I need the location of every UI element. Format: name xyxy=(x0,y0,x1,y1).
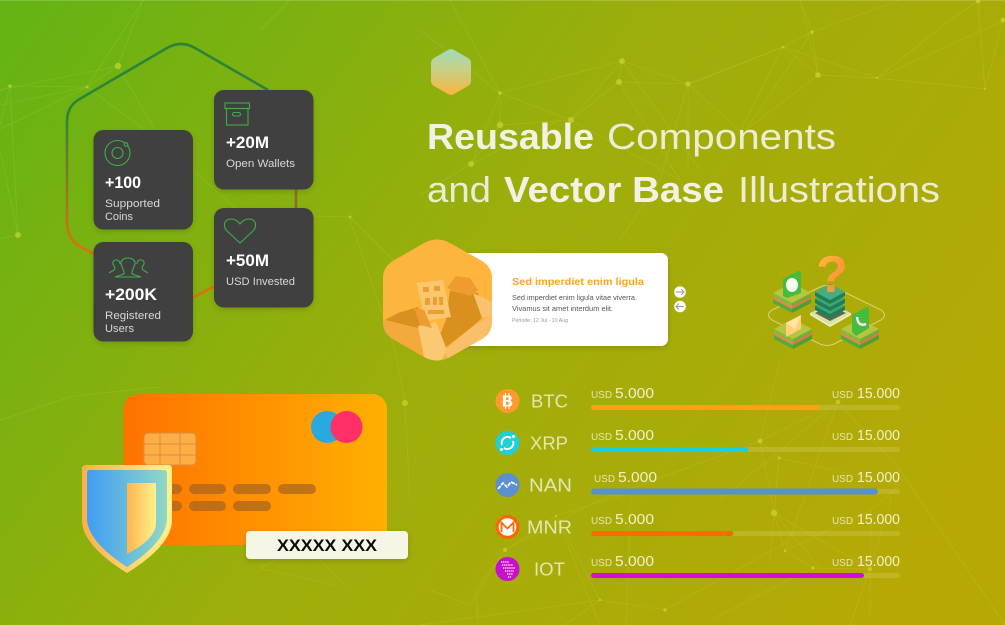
card logo circles xyxy=(311,411,362,443)
title: Illustrations xyxy=(738,169,940,210)
title xyxy=(427,116,940,210)
coin row: NAN: NAN xyxy=(529,474,572,496)
stat card: supported coins: Supported xyxy=(105,198,160,210)
promo card: Sed imperdiet enim ligula vitae viverra. xyxy=(512,293,637,302)
stat card: supported coins: Coins xyxy=(105,211,133,223)
coin row: BTC: BTC xyxy=(531,390,568,412)
stat card: open wallets: +20M xyxy=(226,133,269,152)
coin row: BTC: USD xyxy=(591,389,612,401)
coin row: XRP: USD xyxy=(591,431,612,443)
promo card: Periode: 12 Jul - 10 Aug xyxy=(512,318,568,324)
stat card: registered users xyxy=(94,242,193,342)
coin row: MNR: USD xyxy=(832,515,853,527)
coin row: XRP: XRP xyxy=(530,432,568,454)
icon: archive box xyxy=(225,103,250,125)
coin row: XRP: 15.000 xyxy=(857,428,900,444)
promo card: Sed imperdiet enim ligula xyxy=(512,276,644,288)
card chip xyxy=(144,433,196,465)
coin row: IOT: 5.000 xyxy=(615,554,654,570)
coin row: IOT xyxy=(496,554,900,581)
icon: bitcoin xyxy=(496,389,520,413)
hexagon photo xyxy=(383,240,492,360)
coin row: IOT: USD xyxy=(591,557,612,569)
icon: bitcoin: B xyxy=(502,394,513,410)
name label xyxy=(246,531,408,559)
coin row: IOT: 15.000 xyxy=(857,554,900,570)
stack of layers xyxy=(815,284,845,318)
stat card: registered users: +200K xyxy=(105,285,158,304)
stat card: registered users: Registered xyxy=(105,310,161,322)
name label: XXXXX XXX xyxy=(277,536,378,555)
card number bars xyxy=(145,484,316,511)
coin row: NAN xyxy=(496,470,900,497)
icon: coin ring xyxy=(105,140,130,166)
coin row: XRP xyxy=(496,428,900,455)
stat card: usd invested: +50M xyxy=(226,251,269,270)
stat card: registered users: Users xyxy=(105,323,134,335)
hexagon connector line xyxy=(67,44,296,298)
coin row: NAN: 5.000 xyxy=(618,470,657,486)
coin row: XRP: 5.000 xyxy=(615,428,654,444)
icon: xrp xyxy=(496,431,520,455)
coin row: MNR: 5.000 xyxy=(615,512,654,528)
coin row: NAN: USD xyxy=(594,473,615,485)
credit card xyxy=(124,394,387,545)
isometric illustration xyxy=(768,246,884,349)
shield xyxy=(82,465,172,573)
title: Vector Base xyxy=(504,169,724,210)
arrow: next xyxy=(674,286,686,298)
coin row: BTC xyxy=(496,386,900,413)
platform: phone xyxy=(841,307,879,349)
icon: nano xyxy=(496,473,520,497)
icon: monero xyxy=(496,515,520,539)
question mark: ? xyxy=(816,246,848,304)
card body xyxy=(440,253,668,346)
logo hexagon xyxy=(431,49,471,95)
coin row: NAN: USD xyxy=(832,473,853,485)
stat card: supported coins xyxy=(94,130,193,230)
title: Reusable xyxy=(427,116,594,157)
coin row: BTC: 15.000 xyxy=(857,386,900,402)
stat card: supported coins: +100 xyxy=(105,173,141,192)
platform: envelope xyxy=(774,315,812,349)
coin row: IOT: USD xyxy=(832,557,853,569)
title: and xyxy=(427,169,491,210)
arrow: previous xyxy=(674,301,686,312)
promo card xyxy=(380,235,668,365)
coin row: BTC: USD xyxy=(832,389,853,401)
coin row: IOT: IOT xyxy=(534,558,565,580)
stat card: open wallets xyxy=(214,90,314,190)
promo card: Vivamus sit amet interdum elit. xyxy=(512,304,613,313)
coin row: NAN: 15.000 xyxy=(857,470,900,486)
coin row: MNR: MNR xyxy=(527,516,572,538)
stat card: usd invested: USD Invested xyxy=(226,276,295,288)
stat card: usd invested xyxy=(214,208,314,308)
platform: chip xyxy=(810,303,851,327)
coin row: MNR: USD xyxy=(591,515,612,527)
title: Components xyxy=(607,116,836,157)
icon: heart xyxy=(224,219,256,243)
icon: iota xyxy=(496,557,520,581)
coin row: BTC: 5.000 xyxy=(615,386,654,402)
stat card: open wallets: Open Wallets xyxy=(226,158,296,170)
coin row: XRP: USD xyxy=(832,431,853,443)
coin row: MNR xyxy=(496,512,900,539)
icon: users group xyxy=(109,258,148,277)
platform: message xyxy=(773,271,811,313)
coin row: MNR: 15.000 xyxy=(857,512,900,528)
